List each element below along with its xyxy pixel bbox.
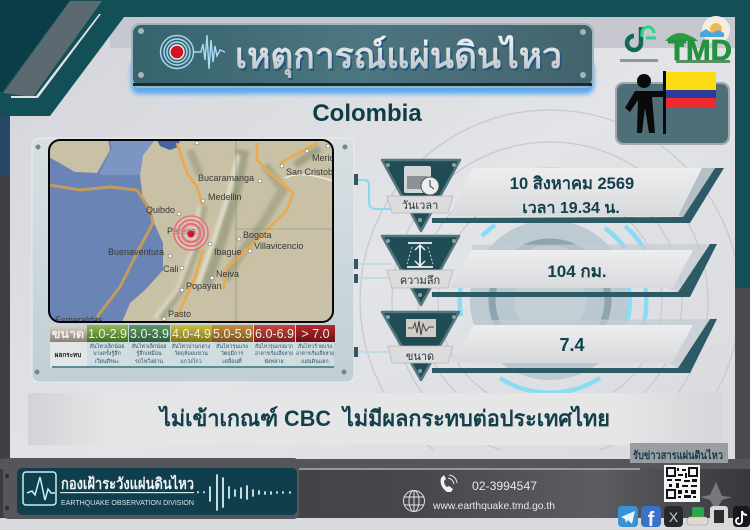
contact: phone and website: 02-3994547 (472, 479, 537, 493)
legend effects row: พังทลาย (264, 358, 284, 365)
icon: X: X (669, 509, 679, 525)
icon: pulse box (23, 472, 56, 505)
panel: CBC notice (28, 393, 722, 445)
earthquake map: Pereira (167, 226, 196, 236)
division badge: EARTHQUAKE OBSERVATION DIVISION (61, 498, 194, 507)
earthquake map: Bucaramanga (198, 173, 254, 183)
magnitude scale (50, 325, 335, 342)
badge icon: seismograph (382, 312, 459, 380)
value: depth: 104 กม. (547, 262, 607, 281)
earthquake map (49, 140, 340, 325)
earthquake map: Quibdo (146, 205, 175, 215)
icon: phone (441, 475, 453, 492)
legend effects row: แผ่นดินแยก (301, 358, 329, 365)
sound wave (198, 475, 290, 510)
icon: globe (404, 490, 424, 512)
icon: Colombia flag (666, 72, 716, 107)
earthquake map: Bogota (243, 230, 272, 240)
title text: เหตุการณ์แผ่นดินไหว (236, 36, 564, 81)
earthquake map: Merida (312, 153, 340, 163)
badge icon: seismograph: ขนาด (406, 351, 434, 363)
value: magnitude: 7.4 (559, 335, 585, 355)
badge icon: calendar and clock (382, 160, 460, 231)
row: date and time (382, 160, 724, 231)
panel: country flag and person (615, 71, 730, 145)
legend effects row: อาคารเริ่มเสียหาย (255, 349, 293, 357)
earthquake map: Cali (163, 264, 179, 274)
badge icon: calendar and clock: วันเวลา (402, 200, 438, 212)
row: date and time: เวลา 19.34 น. (522, 200, 620, 217)
earthquake map: Ibague (214, 247, 242, 257)
badge icon: depth arrows (382, 236, 459, 305)
earthquake map: Pasto (168, 309, 191, 319)
country name: Colombia (312, 100, 422, 127)
connectors from map panel to rows (354, 174, 392, 357)
legend effects row: เคลื่อนที่ (222, 357, 242, 365)
title plate: เหตุการณ์แผ่นดินไหว (235, 34, 562, 79)
social icons (618, 506, 750, 530)
division badge (3, 458, 299, 519)
earthquake map: Neiva (216, 269, 239, 279)
logo: TMD (665, 16, 732, 67)
legend effects row: บางครั้งรู้สึก (93, 349, 121, 357)
contact: phone and website: www.earthquake.tmd.go.th (432, 500, 555, 512)
icon: mobile chat (710, 506, 728, 527)
division name: กองเฝ้าระวังแผ่นดินไหว (61, 474, 194, 493)
panel: map and magnitude legend (32, 138, 354, 382)
legend effects row: รู้สึกเหมือน (136, 350, 162, 357)
legend effects row: วัตถุมีการ (221, 350, 243, 357)
QR caption: รับข่าวสารแผ่นดินไหว (633, 448, 723, 462)
icon: Telegram (618, 506, 638, 527)
value: date and time: 10 สิงหาคม 2569 (510, 174, 634, 193)
title plate (131, 23, 594, 94)
logo: department mark (620, 27, 658, 62)
logo: TMD: TMD (668, 35, 732, 67)
icon: app (687, 507, 708, 525)
earthquake map: San Cristobal (286, 167, 340, 177)
legend effects row: รถไฟวิ่งผ่าน (135, 357, 163, 365)
badge icon: depth arrows: ความลึก (400, 275, 440, 287)
magnitude scale: 6.0-6.9 (255, 327, 294, 341)
epicentre marker (174, 216, 208, 250)
legend effects row: แกว่งไกว (180, 358, 202, 365)
icon: TikTok (733, 506, 750, 527)
QR caption (630, 443, 728, 463)
earthquake map: Esmeraldas (55, 315, 103, 325)
earthquake map: Medellin (208, 192, 242, 202)
earthquake map: Popayan (186, 281, 222, 291)
legend effects row (50, 342, 334, 368)
legend effects row: สั่นไหวร้ายแรง (298, 342, 333, 350)
legend effects row: สั่นไหวรุนแรง (216, 342, 248, 350)
QR code (664, 465, 700, 502)
concentric background rings (360, 110, 735, 450)
legend effects row: สั่นไหวปานกลาง (172, 342, 211, 350)
legend effects row: สั่นไหวเล็กน้อย (132, 342, 166, 350)
legend effects row: เวียนศีรษะ (95, 358, 119, 365)
legend effects row: วัตถุห้อยแขวน (174, 350, 208, 357)
magnitude scale: 1.0-2.9 (88, 327, 127, 341)
earthquake map: Buenaventura (108, 247, 164, 257)
earthquake map: Villavicencio (254, 241, 303, 251)
magnitude scale: 3.0-3.9 (130, 327, 169, 341)
magnitude scale: ขนาด (52, 327, 84, 341)
magnitude scale: > 7.0 (301, 327, 330, 341)
icon: seismic target (160, 35, 225, 69)
notice text: ไม่เข้าเกณฑ์ CBC ไม่มีผลกระทบต่อประเทศไทย (158, 405, 610, 431)
row: magnitude (382, 312, 717, 380)
legend effects row: สั่นไหวเล็กน้อย (90, 342, 124, 350)
magnitude scale: 5.0-5.9 (213, 327, 252, 341)
magnitude scale: 4.0-4.9 (172, 327, 211, 341)
legend effects row: สั่นไหวรุนแรงมาก (255, 342, 293, 350)
contact: phone and website (404, 475, 555, 512)
footer bar (0, 459, 750, 530)
legend effects row: อาคารเริ่มเสียหาย (296, 349, 334, 357)
icon: person with pole (625, 71, 666, 134)
legend effects row: ผลกระทบ (55, 352, 81, 359)
row: depth (382, 236, 717, 305)
